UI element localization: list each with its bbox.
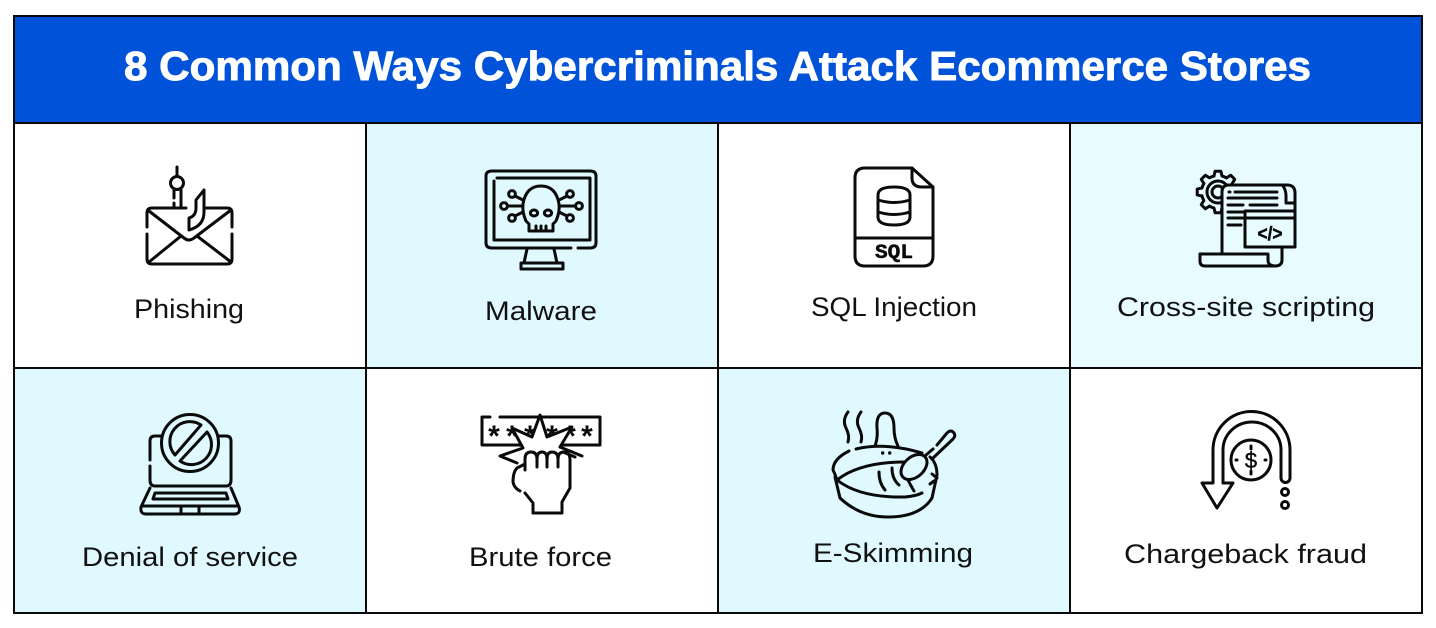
header banner	[14, 16, 1422, 123]
icon: envelope with hook	[147, 167, 232, 264]
panel: brute force	[367, 369, 718, 613]
icon: laptop with block sign	[141, 414, 239, 514]
label: chargeback fraud: Chargeback fraud	[1124, 539, 1367, 569]
icon: monitor with skull	[486, 171, 596, 269]
panel: denial of service	[15, 369, 366, 613]
label: brute force: Brute force	[469, 542, 612, 572]
panel: chargeback fraud	[1071, 369, 1422, 613]
icon: password asterisks: *	[524, 420, 536, 453]
icon: return arrow with dollar coin	[1202, 412, 1290, 508]
panel: malware	[367, 124, 718, 368]
label: e-skimming: E-Skimming	[813, 538, 973, 568]
panel: phishing	[15, 124, 366, 368]
panel: cross-site scripting	[1071, 124, 1422, 368]
icon text: SQL: SQL	[875, 242, 913, 265]
icon: password asterisks: *	[581, 420, 593, 453]
title: 8 Common Ways Cybercriminals Attack Ecommerce Stores	[124, 43, 1311, 89]
label: phishing: Phishing	[134, 294, 244, 324]
panel: SQL injection	[719, 124, 1070, 368]
icon text: dollar sign: $	[1245, 448, 1257, 473]
icon: password asterisks	[488, 420, 593, 453]
icon: password asterisks: *	[506, 420, 518, 453]
label: malware: Malware	[485, 296, 597, 326]
icon: SQL file	[855, 168, 933, 266]
panel: e-skimming	[719, 369, 1070, 613]
icon: code scroll with gear	[1197, 171, 1295, 266]
label: denial of service: Denial of service	[82, 542, 298, 572]
label: SQL injection: SQL Injection	[811, 292, 977, 322]
icon: password asterisks: *	[546, 420, 558, 453]
icon: password asterisks: *	[488, 420, 500, 453]
icon: skimmer pan and spoon	[833, 412, 955, 517]
icon: fist breaking password field	[482, 415, 600, 513]
icon: password asterisks: *	[564, 420, 576, 453]
icon text: code symbol: </>	[1258, 224, 1282, 245]
label: cross-site scripting: Cross-site scripting	[1117, 292, 1375, 322]
